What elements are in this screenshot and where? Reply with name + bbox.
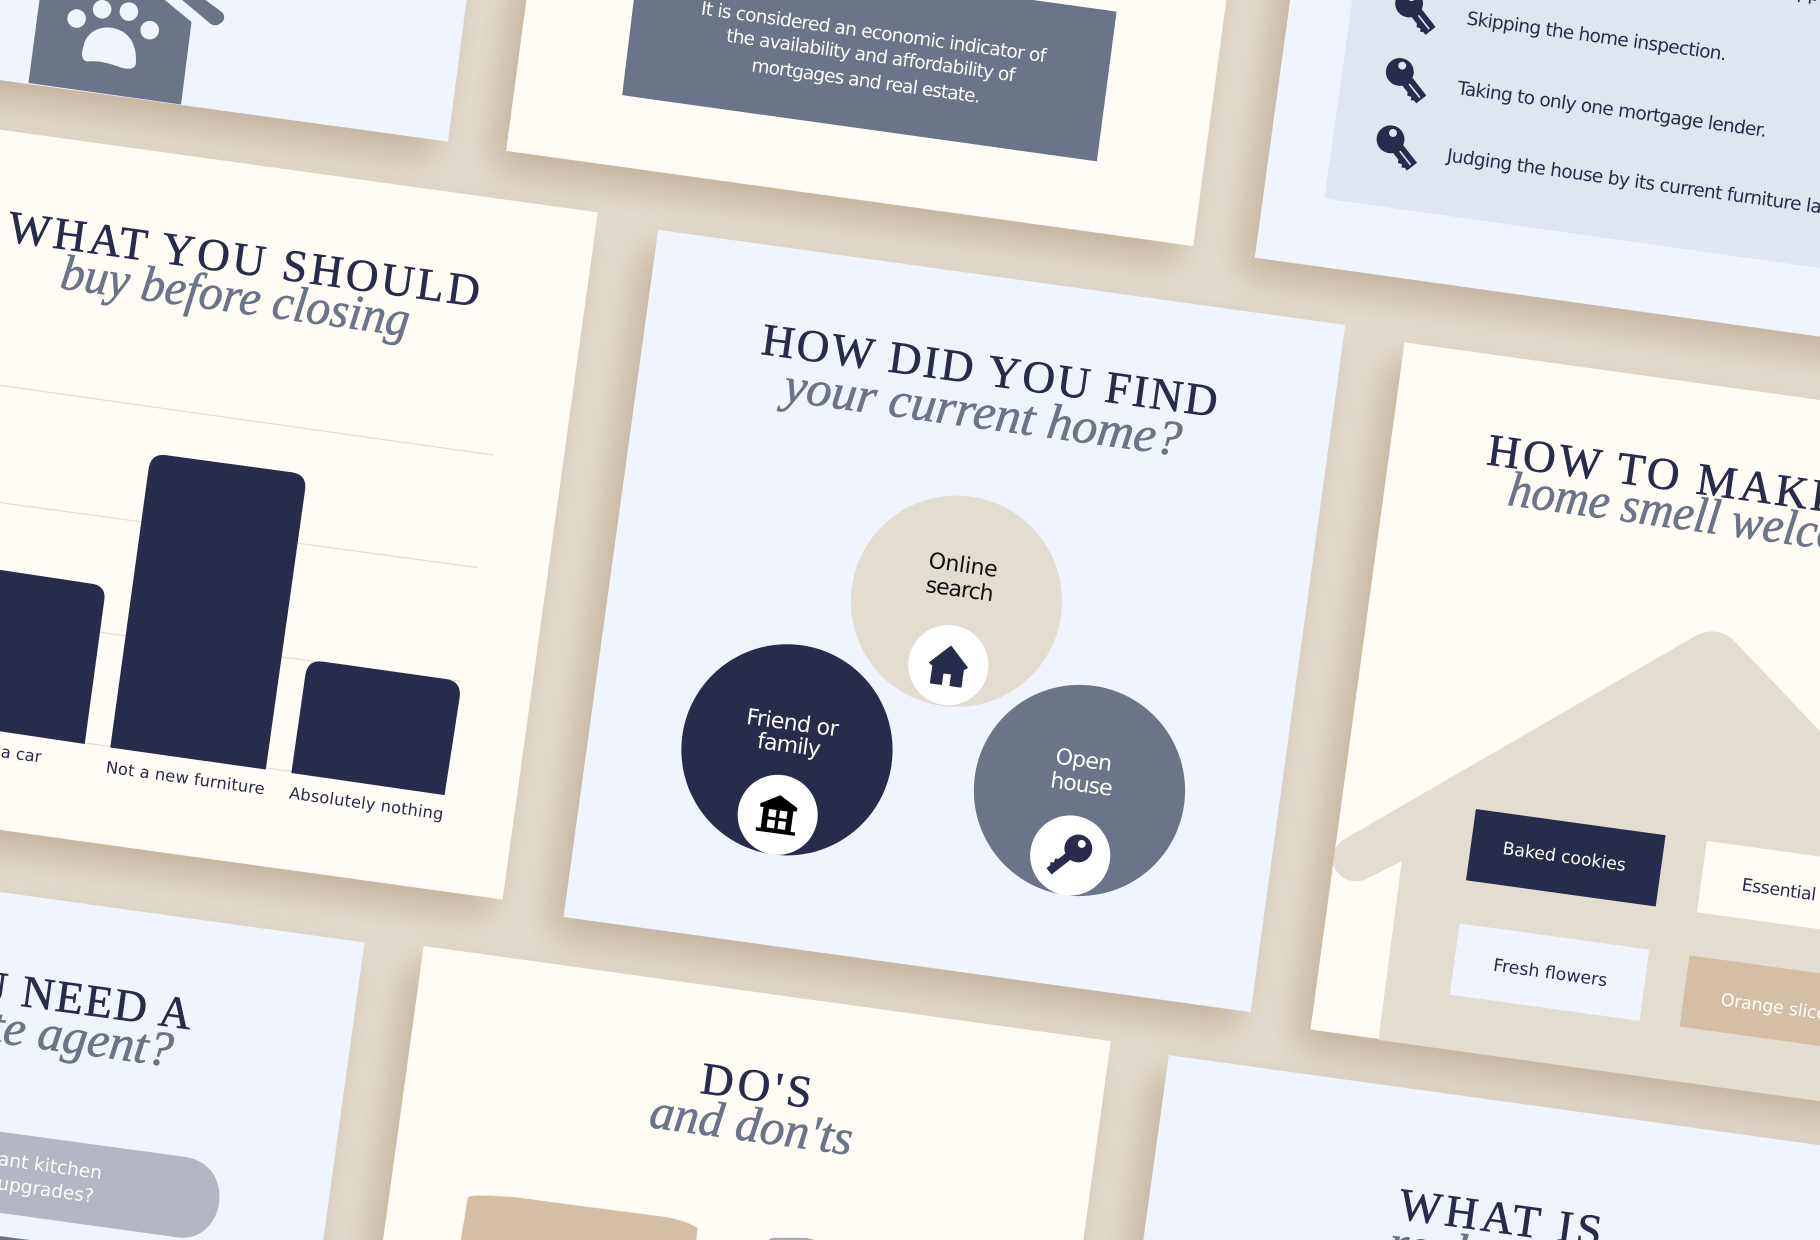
circle: open house: house <box>1049 768 1114 802</box>
panel: how to make home smell welcoming <box>1310 342 1820 1120</box>
option: baked cookies: Baked cookies <box>1501 839 1627 876</box>
subtitle: buy before closing <box>58 245 414 347</box>
icon: key 1 <box>1390 0 1442 40</box>
list item: inspection: Skipping the home inspection. <box>1465 9 1728 65</box>
next pill edge <box>0 1236 30 1240</box>
definition text: It is considered an economic indicator of <box>700 0 1048 67</box>
title: WHAT YOU SHOULD <box>5 202 483 317</box>
tan column <box>461 1196 698 1240</box>
title: DO'S <box>698 1053 815 1118</box>
subtitle: your current home? <box>776 357 1185 467</box>
icon: house <box>927 644 969 687</box>
circle: online search <box>851 496 1062 707</box>
panel: pet-friendly home (top left) <box>0 0 467 142</box>
bar: new furniture <box>110 455 305 770</box>
list item: lender: Taking to only one mortgage lender. <box>1455 78 1768 142</box>
bar: a car <box>0 570 105 744</box>
bar chart <box>0 385 493 795</box>
option: fresh flowers <box>1450 923 1649 1021</box>
option: fresh flowers: Fresh flowers <box>1492 956 1609 991</box>
next column edge <box>768 1238 815 1240</box>
circle: open house: Open <box>1054 745 1114 777</box>
icon: key <box>1040 829 1098 882</box>
title: HOW DID YOU FIND <box>759 314 1221 427</box>
axis label: nothing: Absolutely nothing <box>288 783 445 824</box>
definition text: the availability and affordability of <box>725 26 1017 87</box>
definition text <box>700 0 1048 108</box>
panel: how did you find your current home <box>564 230 1345 1012</box>
circle: online search: Online <box>927 549 999 583</box>
panel: mistakes list (top right) <box>1255 0 1820 337</box>
circle: online search: search <box>924 573 995 607</box>
panel: what you should buy before closing <box>0 130 598 900</box>
house shape <box>1332 631 1820 1120</box>
circle: friend or family: Friend or <box>745 705 841 743</box>
option: baked cookies <box>1466 809 1666 907</box>
subtitle: and don'ts <box>647 1083 856 1166</box>
panel: what is real estate <box>1143 1055 1820 1240</box>
bar: nothing <box>291 661 460 795</box>
option: essential oils <box>1697 841 1820 938</box>
axis label: new furniture: Not a new furniture <box>105 758 266 798</box>
panel: do you need a real estate agent <box>0 892 364 1240</box>
circle: friend or family: family <box>756 729 822 762</box>
icon: key 3 <box>1371 120 1423 175</box>
definition text: mortgages and real estate. <box>750 55 982 108</box>
option: orange slices <box>1680 955 1820 1053</box>
question pill <box>0 1132 219 1238</box>
definition box <box>622 0 1117 161</box>
circle: open house <box>974 685 1185 896</box>
circle: friend or family <box>681 644 893 855</box>
panel: do's and don'ts <box>383 946 1111 1240</box>
icon: building <box>756 793 800 836</box>
list box <box>1324 0 1820 268</box>
panel: economic indicator definition (top center) <box>506 0 1226 246</box>
icon: dog house with paw <box>28 0 224 104</box>
icon: key 2 <box>1380 52 1432 108</box>
